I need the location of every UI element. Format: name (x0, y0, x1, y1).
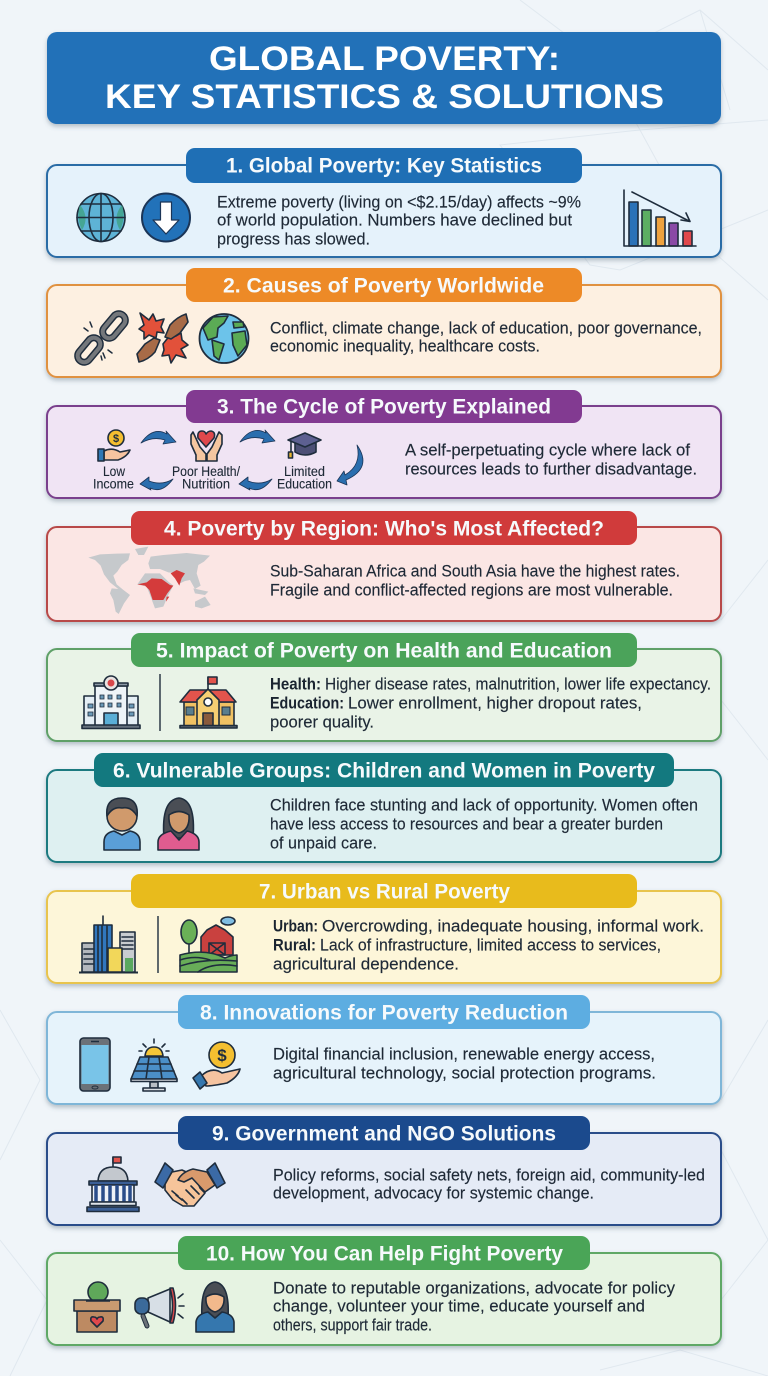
icon: earth (200, 314, 248, 363)
body text 5: Education: (270, 694, 344, 712)
divider (157, 916, 159, 973)
body text 7: Rural: (273, 936, 316, 954)
icon: globe (77, 194, 125, 242)
panel 5: health and education (47, 633, 721, 741)
title banner (47, 32, 721, 124)
body text 3: resources leads to further disadvantage. (405, 460, 697, 478)
body text 9: Policy reforms, social safety nets, foreign aid, community-led (273, 1166, 705, 1184)
heading 7 (131, 874, 637, 908)
label: poor health/nutrition: Nutrition (182, 476, 230, 492)
heading 4: 4. Poverty by Region: Who's Most Affected? (164, 516, 604, 540)
body text 1: of world population. Numbers have declined but (217, 210, 572, 230)
body text 2 (270, 318, 702, 356)
label: limited education: Limited (284, 464, 325, 479)
body text 7: Lack of infrastructure, limited access to services, (320, 936, 661, 954)
body text 3 (405, 440, 697, 478)
body text 1 (217, 192, 581, 248)
heading 8: 8. Innovations for Poverty Reduction (200, 1000, 568, 1024)
body text 5 (270, 674, 711, 732)
icon: coin in hand (98, 430, 130, 461)
body text 7 (273, 916, 704, 974)
body text 4 (270, 562, 680, 600)
icon: coin in hand: $ (113, 433, 119, 445)
icon: megaphone (135, 1288, 184, 1326)
icon: boy (104, 798, 140, 850)
heading 7: 7. Urban vs Rural Poverty (259, 880, 510, 904)
body text 1: progress has slowed. (217, 230, 370, 248)
heading 3: 3. The Cycle of Poverty Explained (217, 394, 551, 418)
heading 10: 10. How You Can Help Fight Poverty (206, 1242, 563, 1266)
heading 6: 6. Vulnerable Groups: Children and Women in Poverty (113, 758, 655, 782)
world map (88, 547, 211, 614)
label: poor health/nutrition: Poor Health/ (172, 464, 240, 479)
body text 2: economic inequality, healthcare costs. (270, 336, 540, 356)
body text 4: Fragile and conflict-affected regions are most vulnerable. (270, 580, 673, 600)
icon: government building (87, 1157, 139, 1212)
heading 1: 1. Global Poverty: Key Statistics (226, 154, 542, 178)
label: low income: Low (103, 464, 125, 479)
body text 10: others, support fair trade. (273, 1316, 432, 1334)
panel 4: region (47, 511, 721, 621)
body text 5: Higher disease rates, malnutrition, lower life expectancy. (325, 674, 711, 694)
heading 10 (178, 1236, 590, 1270)
label: low income (93, 464, 134, 492)
heading 2 (186, 268, 582, 302)
body text 7: Overcrowding, inadequate housing, informal work. (322, 916, 704, 936)
panel 6: vulnerable groups (47, 753, 721, 862)
panel 7: urban vs rural (47, 874, 721, 983)
body text 7: Urban: (273, 916, 318, 936)
heading 2: 2. Causes of Poverty Worldwide (223, 274, 544, 298)
body text 1: Extreme poverty (living on <$2.15/day) affects ~9% (217, 192, 581, 212)
arrows: poverty cycle (140, 430, 363, 490)
body text 9 (273, 1166, 705, 1202)
heading 8 (178, 995, 590, 1029)
panel 10: how you can help (47, 1236, 721, 1345)
heading 9: 9. Government and NGO Solutions (212, 1122, 556, 1146)
icon: mobile phone (80, 1038, 110, 1091)
icon: girl (158, 798, 199, 850)
icon: woman volunteer (196, 1282, 234, 1332)
bar chart: declining trend (624, 190, 696, 246)
body text 6: Children face stunting and lack of opportunity. Women often (270, 796, 698, 814)
body text 3: A self-perpetuating cycle where lack of (405, 440, 690, 460)
icon: school (180, 677, 237, 728)
body text 8: Digital financial inclusion, renewable energy access, (273, 1044, 655, 1064)
title banner: GLOBAL POVERTY: (209, 40, 560, 78)
panel 1: key statistics (47, 148, 721, 257)
label: limited education (277, 464, 332, 492)
panel 2: causes (47, 268, 721, 377)
icon: farm (180, 917, 237, 972)
heading 5 (131, 633, 637, 667)
icon: coin and hand: $ (217, 1046, 227, 1065)
icon: city (79, 916, 138, 972)
heading 1 (186, 148, 582, 183)
panel 3: cycle of poverty (47, 390, 721, 498)
body text 7: agricultural dependence. (273, 954, 459, 974)
panel 8: innovations (47, 995, 721, 1104)
heading 3 (186, 390, 582, 423)
icon: down arrow (142, 194, 190, 242)
icon: solar panel (131, 1039, 177, 1091)
body text 2: Conflict, climate change, lack of education, poor governance, (270, 318, 702, 338)
body text 6 (270, 796, 698, 852)
body text 8: agricultural technology, social protection programs. (273, 1064, 656, 1082)
body text 6: have less access to resources and bear a greater burden (270, 814, 663, 834)
heading 9 (178, 1116, 590, 1150)
label: limited education: Education (277, 476, 332, 492)
heading 4 (131, 511, 637, 545)
icon: hospital (82, 676, 140, 728)
title banner: KEY STATISTICS & SOLUTIONS (105, 78, 664, 116)
label: low income: Income (93, 476, 134, 492)
icon: conflict hands (137, 313, 188, 363)
body text 9: development, advocacy for systemic change. (273, 1184, 594, 1202)
body text 6: of unpaid care. (270, 834, 377, 852)
icon: coin and hand (193, 1042, 240, 1089)
body text 5: poorer quality. (270, 712, 374, 732)
label: poor health/nutrition (172, 464, 240, 492)
panel 9: government and NGO (47, 1116, 721, 1225)
body text 8 (273, 1044, 656, 1082)
icon: graduation cap (288, 433, 321, 458)
divider (159, 674, 161, 731)
body text 10: change, volunteer your time, educate yourself and (273, 1296, 645, 1316)
body text 4: Sub-Saharan Africa and South Asia have the highest rates. (270, 562, 680, 580)
icon: hands with heart (191, 431, 222, 461)
body text 10 (273, 1278, 675, 1334)
icon: broken chain (75, 311, 128, 365)
body text 5: Health: (270, 674, 321, 694)
body text 10: Donate to reputable organizations, advocate for policy (273, 1278, 675, 1298)
body text 5: Lower enrollment, higher dropout rates, (348, 694, 642, 712)
heading 5: 5. Impact of Poverty on Health and Education (156, 638, 612, 662)
heading 6 (94, 753, 674, 787)
icon: handshake (155, 1163, 225, 1206)
icon: donation box (74, 1282, 120, 1332)
